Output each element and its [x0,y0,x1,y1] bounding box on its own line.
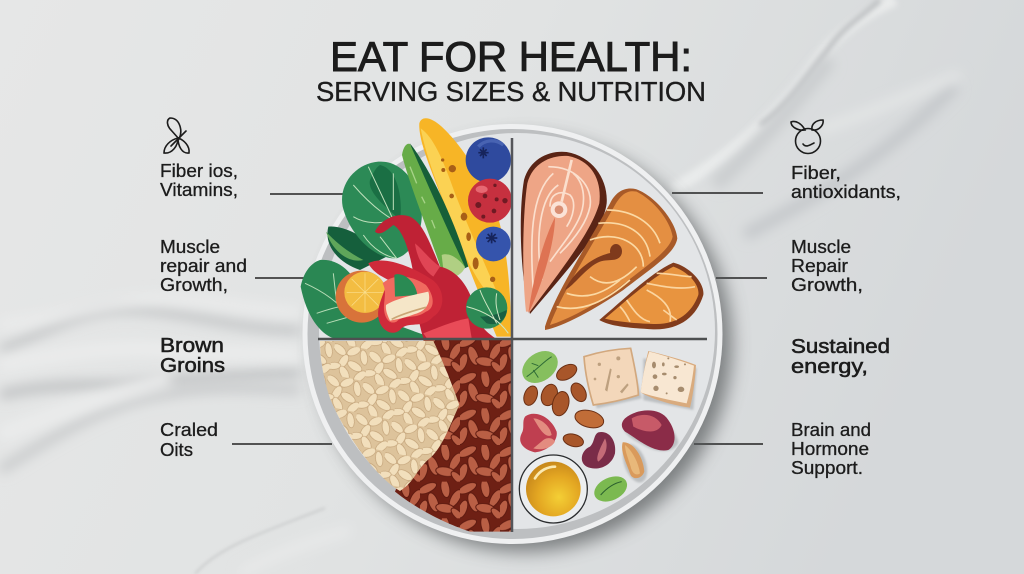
icon: bunny face [791,120,823,154]
right label: brain and hormone: Brain and [791,420,871,440]
right label: muscle repair [791,237,863,295]
left label: crafted oats [160,420,218,460]
red meat piece [520,414,557,452]
item shadows [587,352,697,486]
yellow pepper [419,118,511,337]
panel: brown grains and oats [320,340,512,532]
title line 1: EAT FOR HEALTH: [330,33,692,80]
left label: brown grains: Brown [160,335,224,357]
panel: vegetables and fruit [301,118,512,338]
left label: fiber and vitamins: Fiber ios, [160,161,238,181]
right label: fiber and antioxidants: Fiber, [791,163,841,183]
right label: muscle repair: Growth, [791,275,863,295]
right label: muscle repair: Muscle [791,237,851,257]
kidney piece [582,432,615,469]
left label: fiber and vitamins [160,161,238,200]
left label: fiber and vitamins: Vitamins, [160,180,238,200]
right label: sustained energy: Sustained [791,336,890,358]
almond light [622,442,644,478]
tofu one [584,348,638,405]
left label: muscle repair: Growth, [160,275,228,295]
left label: muscle repair: repair and [160,256,247,276]
left label: brown grains: Groins [160,355,225,377]
salmon steak cooked [545,188,677,330]
blueberry top [466,137,511,183]
cucumber [402,143,468,277]
plate [302,124,732,552]
tofu two [641,351,696,408]
liver piece [622,410,675,450]
blueberry bottom [476,227,511,261]
salmon fillet [599,263,703,329]
red rice [395,340,512,532]
small leaf [466,287,508,333]
right label: fiber and antioxidants [791,163,901,202]
rolled oats [320,341,459,491]
green leaf top [516,344,564,390]
left label: muscle repair: Muscle [160,237,220,257]
bell pepper ring [368,260,442,333]
panel: salmon [521,152,703,330]
right label: brain and hormone: Support. [791,458,863,478]
right label: brain and hormone: Hormone [791,439,869,459]
panel: nuts, tofu, meats and oil [516,344,697,523]
right label: muscle repair: Repair [791,256,848,276]
right label: sustained energy: energy, [791,356,868,378]
lower left leaf [301,260,433,338]
back leaf [326,226,387,270]
left label: muscle repair [160,237,247,295]
right label: sustained energy [791,336,890,378]
left label: brown grains [160,335,225,377]
title line 2: SERVING SIZES & NUTRITION [316,76,706,107]
almonds [521,361,606,449]
left label: crafted oats: Oits [160,440,193,460]
raspberry [468,179,512,223]
left label: crafted oats: Craled [160,420,218,440]
bowl of oil [519,455,587,523]
right label: brain and hormone [791,420,871,478]
red pepper strip [375,215,495,338]
orange slice [336,271,388,323]
plate dividers [318,138,707,532]
green leaf bottom [590,471,631,507]
salmon steak raw [521,152,607,314]
large spinach leaf [342,162,422,258]
icon: leaf sprig [164,118,189,153]
leader lines [232,193,767,444]
right label: fiber and antioxidants: antioxidants, [791,182,901,202]
title [316,33,706,107]
